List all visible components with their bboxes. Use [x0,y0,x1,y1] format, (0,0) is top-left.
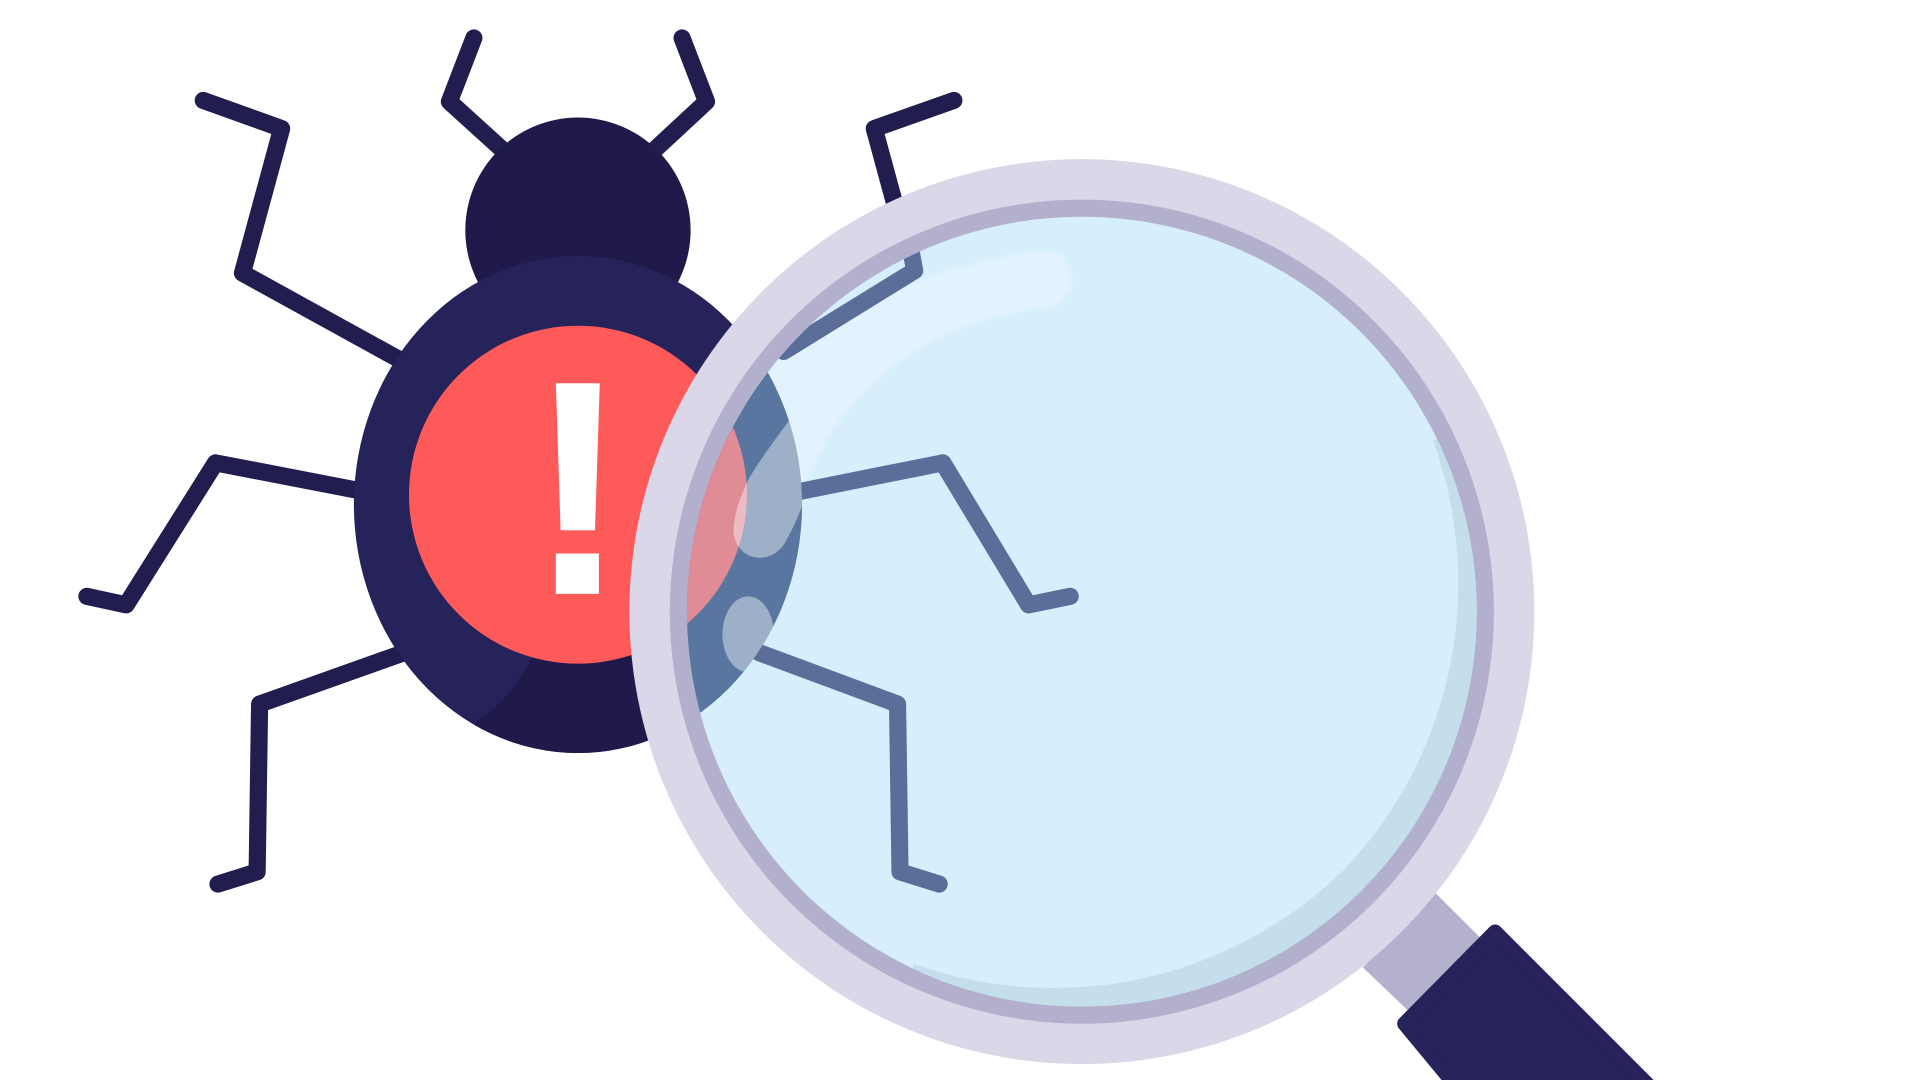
magnifying glass handle [1363,893,1651,1080]
magnified red circle [687,427,747,624]
glass [687,217,1477,1007]
magnified body [686,372,802,713]
glass shaded edge [913,440,1477,1006]
body glare highlight [734,420,802,558]
handle grip [1404,932,1651,1080]
bug legs and antennae [87,38,954,884]
bug seen through lens [686,252,1079,893]
glass highlight [765,250,1072,490]
exclamation mark: ! [527,317,629,659]
bug head [465,118,691,343]
bug [87,38,954,884]
inner ring [670,200,1494,1024]
magnified legs [759,251,1070,884]
magnifying glass lens [629,159,1534,1064]
lower body glare spot [722,596,774,672]
handle neck [1363,893,1488,1022]
illustration: bug under magnifying glass [78,29,1654,1080]
red warning circle [409,326,747,664]
bug body lower shadow [475,655,648,753]
bug body [354,256,802,753]
outer ring [629,159,1534,1064]
